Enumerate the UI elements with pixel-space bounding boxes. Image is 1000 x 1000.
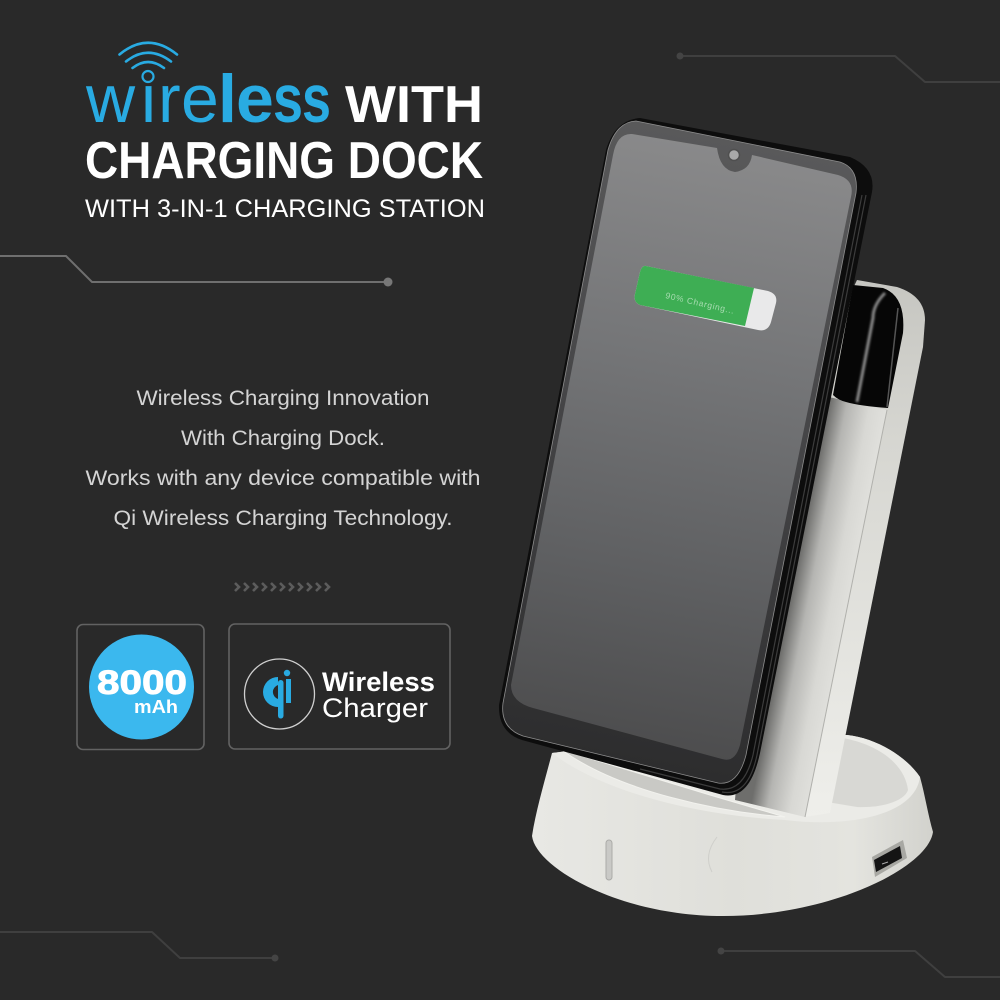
title: e xyxy=(181,61,219,137)
circuit line: top right xyxy=(676,52,1000,82)
phone body xyxy=(499,118,873,795)
product photo: phone on charging dock xyxy=(499,118,933,916)
wireless charger label: Wireless xyxy=(322,667,435,697)
description text block: Qi Wireless Charging Technology. xyxy=(114,507,452,530)
description text block: With Charging Dock. xyxy=(181,427,385,450)
title: r xyxy=(158,61,181,137)
title xyxy=(85,61,483,190)
circuit line: bottom left xyxy=(0,932,278,962)
phone edge highlight xyxy=(640,195,866,793)
circuit line: bottom right xyxy=(718,948,1000,977)
chevron row divider xyxy=(235,583,329,591)
title: l xyxy=(218,61,237,137)
power bank display xyxy=(833,285,903,408)
phone screen with notch xyxy=(511,134,852,760)
wireless charger label xyxy=(322,667,435,723)
capacity badge circle xyxy=(89,634,194,740)
circuit line: left, under title xyxy=(0,256,392,286)
USB port xyxy=(872,840,907,877)
description text block: Wireless Charging Innovation xyxy=(136,387,430,410)
power bank body xyxy=(735,280,925,817)
description text block: Works with any device compatible with xyxy=(86,467,480,490)
title: i xyxy=(141,61,156,137)
seam mark on base xyxy=(708,837,717,872)
front camera xyxy=(728,150,740,160)
capacity value: 8000 xyxy=(97,664,187,702)
icon: wifi signal above wireless xyxy=(120,43,177,82)
panel: 8000 mAh capacity xyxy=(77,624,204,750)
title: WITH xyxy=(345,76,483,134)
dock base xyxy=(532,735,933,916)
wireless pad surface xyxy=(562,750,785,817)
capacity unit: mAh xyxy=(134,697,178,717)
charging status bar xyxy=(635,266,776,330)
title: s xyxy=(273,61,303,137)
wireless charger label: Charger xyxy=(322,693,428,723)
description text block xyxy=(86,387,480,530)
title: w xyxy=(85,61,136,137)
indicator slot xyxy=(606,840,612,880)
title: e xyxy=(236,61,274,137)
phone bezel xyxy=(503,121,856,783)
title: CHARGING DOCK xyxy=(85,132,483,190)
icon: Qi logo xyxy=(244,659,314,729)
charging text: 90% Charging... xyxy=(665,290,735,316)
title: s xyxy=(302,61,331,137)
dock well xyxy=(815,738,908,807)
subtitle: WITH 3-IN-1 CHARGING STATION xyxy=(85,195,485,223)
panel: Qi wireless charger xyxy=(229,624,450,749)
